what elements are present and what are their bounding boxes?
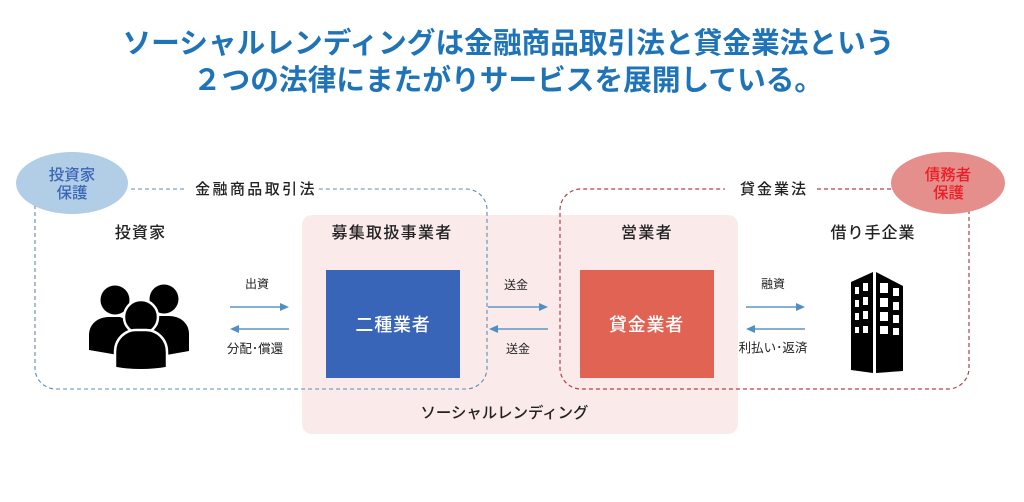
arrow: loan bbox=[746, 303, 805, 311]
arrow: repayment bbox=[746, 325, 805, 333]
title: ２つの法律にまたがりサービスを展開している。 bbox=[193, 64, 823, 97]
title bbox=[123, 27, 894, 97]
box: money lender bbox=[580, 270, 714, 378]
arrow: distribution bbox=[230, 325, 289, 333]
box: money lender: 貸金業者 bbox=[609, 315, 684, 335]
ellipse: debtor protection: 債務者 bbox=[925, 166, 971, 184]
arrow: investment bbox=[230, 303, 289, 311]
label: investor: 投資家 bbox=[115, 224, 166, 242]
label: interest and repayment: 利払い･返済 bbox=[739, 341, 808, 355]
frame: money lending law bbox=[560, 189, 969, 389]
title: ソーシャルレンディングは金融商品取引法と貸金業法という bbox=[123, 27, 894, 60]
ellipse: investor protection: 投資家 bbox=[49, 166, 95, 184]
label: remittance bottom: 送金 bbox=[506, 341, 530, 356]
arrow: remittance left bbox=[489, 325, 548, 333]
ellipse: debtor protection: 保護 bbox=[933, 184, 964, 202]
label: solicitation business: 募集取扱事業者 bbox=[331, 224, 453, 242]
panel: social lending bbox=[302, 215, 738, 434]
heading: financial instruments law: 金融商品取引法 bbox=[195, 181, 317, 198]
label: remittance top: 送金 bbox=[504, 277, 528, 292]
frame: financial instruments law bbox=[35, 189, 487, 389]
icon: office building bbox=[851, 272, 903, 373]
label: distribution and redemption: 分配･償還 bbox=[227, 342, 284, 356]
ellipse: debtor protection bbox=[891, 152, 1005, 214]
label: sales business: 営業者 bbox=[621, 224, 673, 242]
icon: investors group bbox=[89, 284, 189, 370]
box: type II business: 二種業者 bbox=[355, 315, 431, 335]
heading: money lending law: 貸金業法 bbox=[740, 181, 808, 198]
label: investment: 出資 bbox=[245, 277, 269, 291]
ellipse: investor protection bbox=[16, 152, 128, 214]
ellipse: investor protection: 保護 bbox=[56, 184, 88, 202]
label: social lending: ソーシャルレンディング bbox=[421, 403, 588, 422]
box: type II business bbox=[326, 270, 460, 378]
label: borrower company: 借り手企業 bbox=[830, 224, 916, 242]
arrow: remittance right bbox=[488, 303, 548, 311]
label: loan: 融資 bbox=[761, 277, 785, 291]
